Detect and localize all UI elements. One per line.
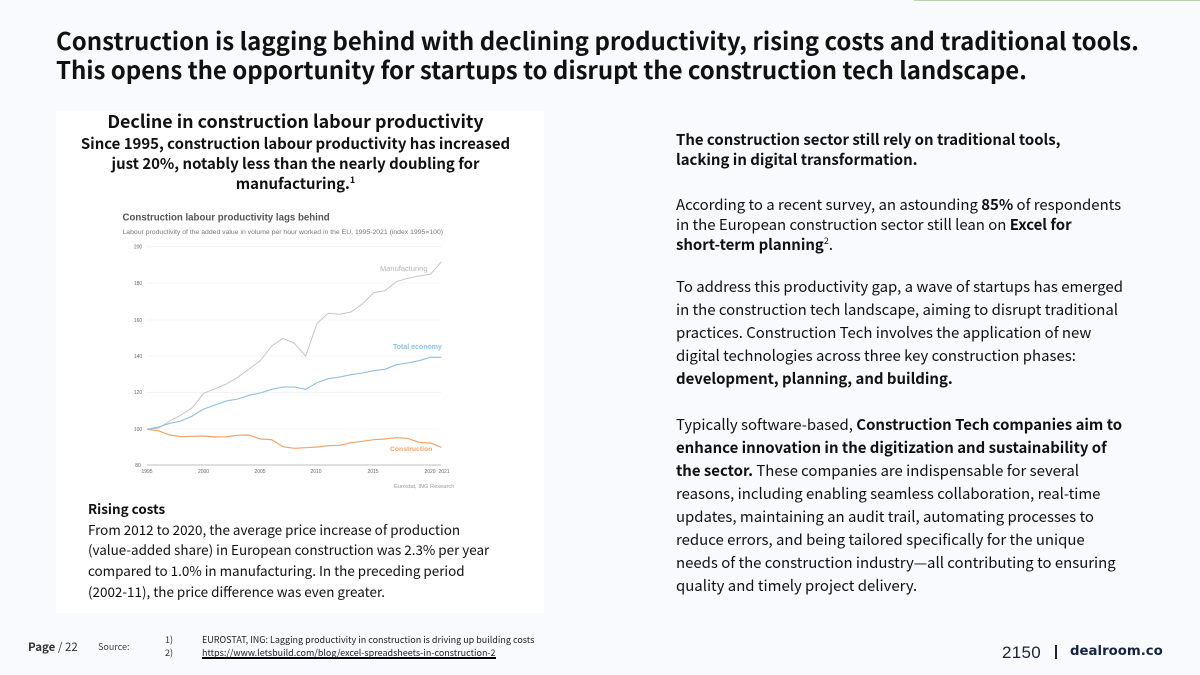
x axis labels: 2010 [310,469,322,475]
startups paragraph: digital technologies across three key construction phases: [676,345,1076,366]
footnotes [202,633,534,659]
construction tech paragraph: updates, maintaining an audit trail, automating processes to [676,506,1094,527]
top accent line [914,0,1200,1]
lead statement: The construction sector still rely on traditional tools, [676,129,1060,150]
series labels: Manufacturing [380,264,428,273]
startups paragraph: To address this productivity gap, a wave of startups has emerged [676,276,1123,297]
chart subtitle: Labour productivity of the added value in volume per hour worked in the EU, 1995-2021 (index 1995=100) [122,229,443,236]
construction tech paragraph: reasons, including enabling seamless collaboration, real-time [676,483,1100,504]
panel summary text [81,133,510,194]
rising costs text: compared to 1.0% in manufacturing. In the preceding period [88,560,465,580]
survey paragraph: short-term planning2. [676,234,833,255]
chart source: Eurostat, ING Research [394,484,454,490]
panel summary text: Since 1995, construction labour productivity has increased [81,133,510,154]
title [56,22,1139,86]
survey paragraph: According to a recent survey, an astounding 85% of respondents [676,194,1121,215]
source label: Source: [98,640,130,653]
x axis labels: 2021 [438,469,450,475]
y axis labels: 160 [134,318,142,324]
panel: labour productivity [56,111,544,613]
footnote numbers: 1) [165,633,173,646]
page number: Page / 22 [28,639,78,655]
panel summary text: manufacturing.1 [236,173,355,194]
startups paragraph [676,276,1123,389]
y axis labels: 180 [134,281,142,287]
y axis labels: 140 [134,354,142,360]
x axis labels: 2000 [198,469,209,475]
construction line [147,429,441,448]
construction tech paragraph: enhance innovation in the digitization and sustainability of [676,437,1107,458]
right text column [676,129,1123,596]
panel summary text: just 20%, notably less than the nearly doubling for [112,153,479,174]
logo: 2150: 2150 [1002,643,1041,662]
x axis labels: 1995 [141,469,153,475]
rising costs text: (2002-11), the price difference was even greater. [88,581,385,601]
rising costs text: (value-added share) in European construction was 2.3% per year [88,539,489,559]
y axis labels: 100 [134,427,142,433]
footnote numbers: 2) [165,646,173,659]
construction tech paragraph: quality and timely project delivery. [676,575,917,596]
lead statement: lacking in digital transformation. [676,149,918,170]
series labels [380,264,442,453]
rising costs text: From 2012 to 2020, the average price increase of production [88,519,460,539]
total economy line [147,357,441,429]
x axis labels: 2005 [254,469,266,475]
x axis labels: 2020 [424,469,436,475]
rising costs text [88,498,490,601]
survey paragraph: in the European construction sector still lean on Excel for [676,214,1072,235]
y axis labels: 200 [134,244,142,250]
panel heading: Decline in construction labour productivity [107,108,484,134]
x axis labels [141,469,450,475]
footnote numbers [165,633,173,659]
startups paragraph: practices. Construction Tech involves the application of new [676,322,1091,343]
line chart [122,212,454,490]
logo divider [1055,645,1057,659]
startups paragraph: development, planning, and building. [676,368,953,389]
footnotes: EUROSTAT, ING: Lagging productivity in construction is driving up building costs [202,633,534,646]
title: Construction is lagging behind with declining productivity, rising costs and traditional tools. [56,22,1139,57]
lead statement [676,129,1060,170]
y axis labels: 120 [134,390,142,396]
logo: dealroom: dealroom.co [1070,644,1163,659]
construction tech paragraph: Typically software-based, Construction Tech companies aim to [676,414,1122,435]
title: This opens the opportunity for startups to disrupt the construction tech landscape. [56,51,1027,86]
survey paragraph [676,194,1121,255]
manufacturing line [147,262,441,429]
construction tech paragraph: needs of the construction industry—all contributing to ensuring [676,552,1116,573]
series labels: Construction [390,446,432,453]
x axis labels: 2015 [367,469,379,475]
y axis labels [134,244,142,469]
series labels: Total economy [393,344,442,351]
chart title: Construction labour productivity lags behind [122,212,330,224]
construction tech paragraph: the sector. These companies are indispensable for several [676,460,1079,481]
y axis labels: 80 [135,463,141,469]
rising costs text: Rising costs [88,498,165,518]
startups paragraph: in the construction tech landscape, aiming to disrupt traditional [676,299,1118,320]
construction tech paragraph: reduce errors, and being tailored specifically for the unique [676,529,1085,550]
footnotes: https://www.letsbuild.com/blog/excel-spreadsheets-in-construction-2 [202,646,496,659]
construction tech paragraph [676,414,1122,596]
